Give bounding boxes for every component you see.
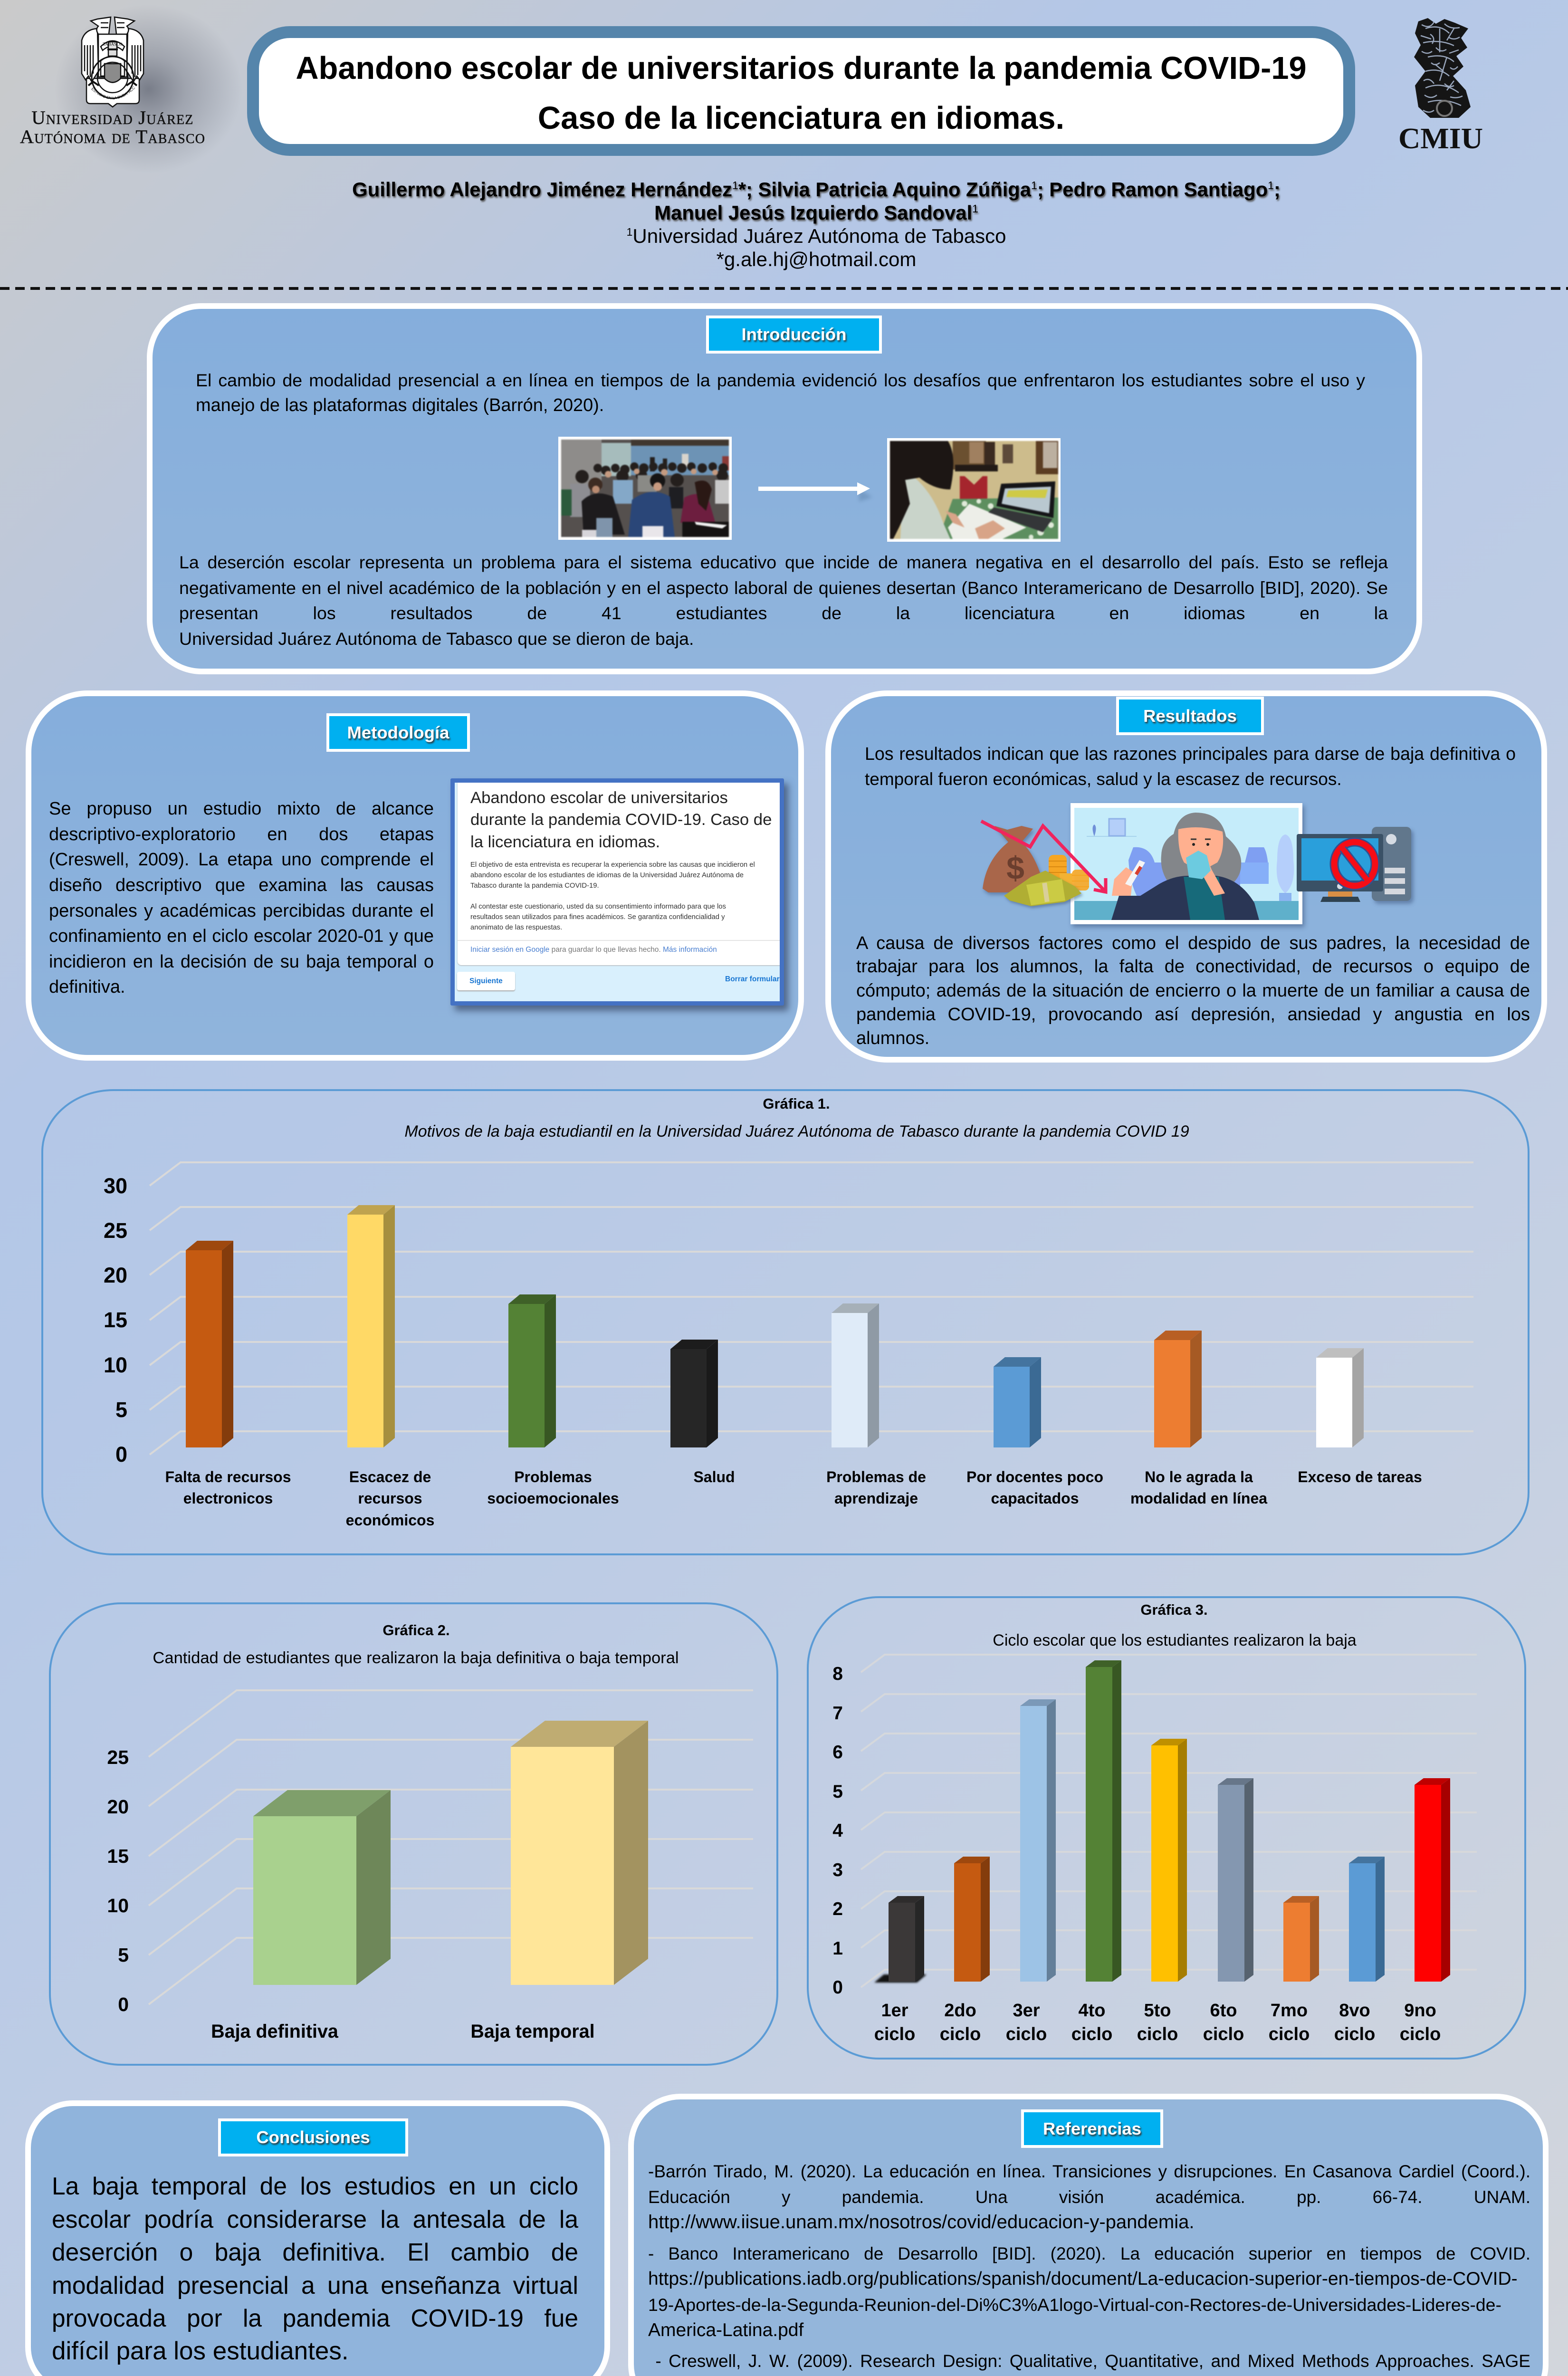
chart 3 y axis: 4 (832, 1820, 843, 1841)
chart 2 category labels: Baja temporal (470, 2021, 595, 2042)
results text (856, 929, 1530, 1053)
intro text block 2: La deserción escolar representa un problema para el sistema educativo que incide de manera negativa en el desarrollo del país. Esto se refleja (179, 552, 1388, 572)
chart 3 y axis (832, 1664, 843, 1998)
methodology text: confinamiento en el ciclo escolar 2020-01 y que (49, 926, 434, 946)
title line 2: Caso de la licenciatura en idiomas. (538, 101, 1064, 136)
chart 3 category labels: 3er (1013, 2001, 1040, 2021)
form description: anonimato de las respuestas. (470, 924, 562, 931)
heading: Referencias: Referencias (1043, 2119, 1141, 2138)
chart 1 category labels: No le agrada la (1145, 1468, 1253, 1485)
form description: Al contestar este cuestionario, usted da su consentimiento informado para que los (470, 903, 726, 910)
chart 3 category labels: 2do (944, 2001, 976, 2021)
form screenshot: la licenciatura en idiomas. (470, 833, 660, 851)
chart 3 category labels: 4to (1079, 2001, 1105, 2021)
chart 1 title: Gráfica 1. (763, 1095, 830, 1112)
chart 3 y axis: 3 (832, 1860, 843, 1880)
author names line 2: Manuel Jesús Izquierdo Sandoval1 (654, 201, 978, 224)
form next button: Siguiente (469, 977, 503, 985)
methodology text: descriptivo-exploratorio en dos etapas (49, 824, 434, 844)
methodology text (49, 796, 434, 1003)
photo: classroom (558, 437, 732, 540)
chart 1 category labels (165, 1468, 1422, 1529)
chart 1 subtitle: Motivos de la baja estudiantil en la Universidad Juárez Autónoma de Tabasco durante la pandemia COVID 19 (404, 1122, 1189, 1140)
form title: Abandono escolar de universitarios (470, 789, 728, 807)
chart 1 y axis: 5 (115, 1398, 127, 1422)
chart 3 category labels: 8vo (1339, 2001, 1370, 2021)
chart panel: Gráfica 1 (42, 1090, 1529, 1554)
chart 2 title: Gráfica 2. (382, 1622, 450, 1638)
heading: Conclusiones: Conclusiones (256, 2127, 370, 2147)
chart 2 subtitle: Cantidad de estudiantes que realizaron la baja definitiva o baja temporal (153, 1649, 679, 1667)
results text: trabajar para los alumnos, la falta de conectividad, de recursos o equipo de (856, 957, 1530, 977)
form description: El objetivo de esta entrevista es recuperar la experiencia sobre las causas que incidieron el (470, 861, 755, 869)
title box (247, 26, 1355, 156)
bar: 3er ciclo = 7 (1020, 1699, 1056, 1982)
icon: computer with prohibition sign (1297, 827, 1411, 902)
bar: No le agrada la modalidad en línea = 12 (1154, 1331, 1202, 1447)
form next button (457, 972, 515, 990)
form screenshot (450, 778, 784, 1006)
conclusions text: difícil para los estudiantes. (52, 2337, 349, 2365)
chart 3 subtitle: Ciclo escolar que los estudiantes realizaron la baja (993, 1631, 1357, 1649)
heading: Resultados (1116, 697, 1264, 735)
results text: alumnos. (856, 1028, 929, 1048)
reference: Banco Interamericano: 19-Aportes-de-la-Segunda-Reunion-del-Di%C3%A1logo-Virtual-con-Rectores-de-Universidades-Lideres-de- (648, 2295, 1501, 2315)
chart 1 y axis: 20 (104, 1263, 127, 1287)
chart 3 category labels: ciclo (1334, 2024, 1375, 2044)
icon: mayan figure (1397, 17, 1485, 152)
chart 2 y axis: 25 (107, 1746, 129, 1768)
bar: Problemas socioemocionales = 16 (508, 1294, 556, 1447)
form card (458, 783, 790, 965)
chart 2 y axis: 5 (118, 1944, 129, 1966)
chart 3 category labels (874, 2001, 1441, 2044)
bar: Falta de recursos electronicos = 22 (186, 1241, 233, 1447)
title line 1: Abandono escolar de universitarios durante la pandemia COVID-19 (296, 51, 1307, 86)
icon: falling red arrow (981, 821, 1106, 892)
form description (470, 860, 779, 933)
bar: 5to ciclo = 6 (1151, 1739, 1187, 1982)
bar shadow (874, 1974, 927, 1983)
chart 1 y axis: 10 (104, 1353, 127, 1377)
chart 3 category labels: ciclo (874, 2024, 915, 2044)
chart 3 category labels: 1er (881, 2001, 908, 2021)
results text: pandemia COVID-19, provocando así depresión, ansiedad y angustia en los (856, 1005, 1530, 1025)
chart 3 y axis: 5 (832, 1782, 843, 1802)
chart panel: Gráfica 2 (50, 1603, 777, 2065)
results text: A causa de diversos factores como el despido de sus padres, la necesidad de (856, 933, 1530, 953)
authors (333, 176, 1300, 277)
arrow (755, 480, 877, 504)
chart 3 category labels: 6to (1210, 2001, 1237, 2021)
photo: student with laptop (887, 438, 1061, 542)
chart 3 category labels: ciclo (1203, 2024, 1244, 2044)
methodology text: incidieron en la decisión de su baja temporal o (49, 952, 434, 972)
intro text block 1: El cambio de modalidad presencial a en línea en tiempos de la pandemia evidenció los desafíos que enfrentaron los estudiantes sobre el uso y (196, 370, 1365, 390)
chart 3 category labels: ciclo (940, 2024, 981, 2044)
chart 1 category labels: Problemas de (826, 1468, 926, 1485)
bar: Problemas de aprendizaje = 15 (832, 1303, 879, 1447)
methodology text: Se propuso un estudio mixto de alcance (49, 799, 434, 819)
form description: resultados sean utilizados para fines académicos. Se garantiza confidencialidad y (470, 913, 725, 921)
bar: 7mo ciclo = 2 (1283, 1896, 1319, 1982)
results intro text: temporal fueron económicas, salud y la escasez de recursos. (865, 769, 1342, 789)
chart 3 category labels: ciclo (1071, 2024, 1112, 2044)
chart 1 category labels: Escacez de (349, 1468, 431, 1485)
chart 1 category labels: electronicos (183, 1490, 273, 1507)
chart 1 category labels: Exceso de tareas (1298, 1468, 1422, 1485)
chart 2 y axis (107, 1746, 129, 2015)
chart 2 y axis: 15 (107, 1845, 129, 1867)
logo wordmark: Universidad Juárez (31, 107, 194, 128)
methodology text: diseño descriptivo que examina las causas (49, 875, 434, 895)
reference: Barrón: Educación y pandemia. Una visión académica. pp. 66-74. UNAM. (648, 2187, 1530, 2207)
icon: money bag, coins and bills (983, 826, 1089, 906)
bar: Exceso de tareas = 10 (1316, 1348, 1364, 1447)
bar: Baja temporal = 25 (511, 1721, 648, 1985)
chart 2 category labels: Baja definitiva (211, 2021, 339, 2042)
icon: money bag, coins and bills: $ (1006, 850, 1024, 886)
icon: university crest (14, 14, 214, 150)
intro text block 2 (179, 549, 1388, 654)
conclusions text: La baja temporal de los estudios en un ciclo (52, 2172, 578, 2200)
reference: Banco Interamericano: https://publications.iadb.org/publications/spanish/document/La-educacion-superior-en-tiempos-de-COVID- (648, 2269, 1518, 2289)
chart 3 category labels: 5to (1144, 2001, 1171, 2021)
intro text block 2: Universidad Juárez Autónoma de Tabasco que se dieron de baja. (179, 629, 694, 649)
conclusions text: modalidad presencial a una enseñanza virtual (52, 2271, 578, 2299)
reference: Banco Interamericano: America-Latina.pdf (648, 2320, 803, 2340)
chart 1 category labels: socioemocionales (487, 1490, 619, 1507)
chart 1 category labels: aprendizaje (834, 1490, 918, 1507)
chart 1 category labels: económicos (346, 1512, 434, 1529)
bar: 4to ciclo = 8 (1086, 1660, 1121, 1982)
chart 1 category labels: Falta de recursos (165, 1468, 291, 1485)
form description: Tabasco durante la pandemia COVID-19. (470, 882, 599, 890)
heading: Metodología: Metodología (347, 723, 449, 742)
reference: Creswell: - Creswell, J. W. (2009). Research Design: Qualitative, Quantitative, and Mixed Methods Approaches. SAGE (655, 2351, 1530, 2371)
woman (1111, 813, 1259, 920)
chart 3 category labels: 9no (1404, 2001, 1436, 2021)
conclusions text (52, 2173, 578, 2368)
email: *g.ale.hj@hotmail.com (717, 248, 916, 270)
heading: Introducción: Introducción (741, 325, 847, 344)
panel: metodología (26, 690, 804, 1061)
bar: 6to ciclo = 5 (1218, 1778, 1253, 1982)
chart 3 category labels: ciclo (1006, 2024, 1047, 2044)
chart 3 y axis: 0 (832, 1977, 843, 1998)
methodology text: personales y académicas percibidas durante el (49, 901, 434, 921)
heading: Resultados: Resultados (1143, 706, 1237, 726)
heading: Metodología (326, 713, 470, 752)
panel: referencias (628, 2094, 1549, 2376)
intro text block 2: presentan los resultados de 41 estudiantes de la licenciatura en idiomas en la (179, 603, 1388, 623)
chart 3 category labels: ciclo (1400, 2024, 1441, 2044)
decorative logo shadow (19, 5, 242, 181)
affiliation: 1Universidad Juárez Autónoma de Tabasco (627, 225, 1006, 247)
conclusions text: deserción o baja definitiva. El cambio de (52, 2238, 578, 2266)
chart 3 y axis: 6 (832, 1742, 843, 1763)
chart 1 category labels: Salud (693, 1468, 735, 1485)
form description: abandono escolar de los estudiantes de idiomas de la Universidad Juárez Autónoma de (470, 872, 744, 879)
bar: Baja definitiva = 18 (253, 1790, 391, 1985)
illustration frame (1071, 803, 1302, 924)
form sign-in line: Iniciar sesión en Google para guardar lo que llevas hecho. Más información (470, 946, 717, 954)
reference: Barrón: http://www.iisue.unam.mx/nosotros/covid/educacion-y-pandemia. (648, 2212, 1194, 2232)
heading: Introducción (706, 316, 882, 354)
intro text block 2: negativamente en el nivel académico de la población y en el aspecto laboral de quienes desertan (Banco Interamericano de Desarrollo [BID], 2020). Se (179, 578, 1388, 598)
intro text block 1 (196, 367, 1365, 421)
chart 1 category labels: Por docentes poco (966, 1468, 1103, 1485)
bar: Escacez de recursos económicos = 26 (347, 1205, 395, 1447)
panel: introducción (147, 303, 1422, 674)
results text: cómputo; además de la situación de encierro o la muerte de un familiar a causa de (856, 981, 1530, 1001)
chart 1 category labels: Problemas (514, 1468, 592, 1485)
results intro text: Los resultados indican que las razones principales para darse de baja definitiva o (865, 744, 1516, 764)
chart 2 category labels (211, 2021, 595, 2042)
bar: 2do ciclo = 3 (954, 1857, 990, 1982)
panel: conclusiones (25, 2100, 610, 2376)
bar: 9no ciclo = 5 (1415, 1778, 1450, 1982)
chart panel: Gráfica 3 (808, 1597, 1525, 2059)
chart 1 y axis: 25 (104, 1218, 127, 1243)
CMIU wordmark: CMIU (1398, 123, 1483, 155)
panel: resultados (825, 690, 1547, 1063)
reference: Banco Interamericano: - Banco Interamericano de Desarrollo [BID]. (2020). La educación superior en tiempos de COVID. (648, 2244, 1530, 2263)
chart 3 y axis: 1 (832, 1938, 843, 1959)
logo wordmark: Autónoma de Tabasco (20, 126, 205, 147)
crest lettering: TABASCO (103, 42, 123, 47)
heading: Referencias (1021, 2109, 1163, 2148)
bar: 1er ciclo = 2 (889, 1896, 924, 1982)
chart 1 category labels: modalidad en línea (1130, 1490, 1267, 1507)
conclusions text: escolar podría considerarse la antesala de la (52, 2205, 578, 2233)
chart 3 y axis: 8 (832, 1664, 843, 1684)
chart 2 y axis: 10 (107, 1895, 129, 1916)
chart 1 y axis: 15 (104, 1308, 127, 1332)
chart 3 category labels: 7mo (1271, 2001, 1308, 2021)
chart 3 y axis: 2 (832, 1899, 843, 1919)
bar: Por docentes poco capacitados = 9 (994, 1357, 1041, 1447)
chart 1 category labels: recursos (358, 1490, 422, 1507)
heading: Conclusiones (218, 2118, 408, 2156)
intro text block 1: manejo de las plataformas digitales (Barrón, 2020). (196, 395, 604, 415)
reference: Barrón: -Barrón Tirado, M. (2020). La educación en línea. Transiciones y disrupciones. En Casanova Cardiel (Coord.). (648, 2162, 1530, 2181)
logo: CMIU (1397, 17, 1485, 152)
conclusions text: provocada por la pandemia COVID-19 fue (52, 2304, 578, 2332)
reference: Barrón (648, 2159, 1530, 2238)
chart 1 y axis: 30 (104, 1174, 127, 1198)
logo: Universidad Juárez Autónoma de Tabasco (14, 14, 214, 150)
reference: Banco Interamericano (648, 2241, 1530, 2346)
logo wordmark (14, 108, 211, 149)
methodology text: definitiva. (49, 977, 125, 997)
bar: 8vo ciclo = 3 (1349, 1857, 1385, 1982)
illustration: sick woman, money and computer (979, 803, 1416, 927)
form screenshot: durante la pandemia COVID-19. Caso de (470, 811, 772, 829)
bar: Salud = 11 (670, 1340, 718, 1447)
chart 3 category labels: ciclo (1269, 2024, 1310, 2044)
author names line 1: Guillermo Alejandro Jiménez Hernández1*; Silvia Patricia Aquino Zúñiga1; Pedro Ramon Santiago1; (352, 178, 1281, 201)
chart 1 y axis: 0 (115, 1442, 127, 1466)
methodology text: (Creswell, 2009). La etapa uno comprende el (49, 850, 434, 870)
chart 2 y axis: 0 (118, 1993, 129, 2015)
chart 3 y axis: 7 (832, 1703, 843, 1724)
chart 3 category labels: ciclo (1137, 2024, 1178, 2044)
results intro text (865, 741, 1516, 795)
chart 1 y axis (104, 1174, 127, 1466)
chart 2 y axis: 20 (107, 1796, 129, 1818)
chart 1 category labels: capacitados (991, 1490, 1079, 1507)
chart 3 title: Gráfica 3. (1140, 1601, 1208, 1618)
